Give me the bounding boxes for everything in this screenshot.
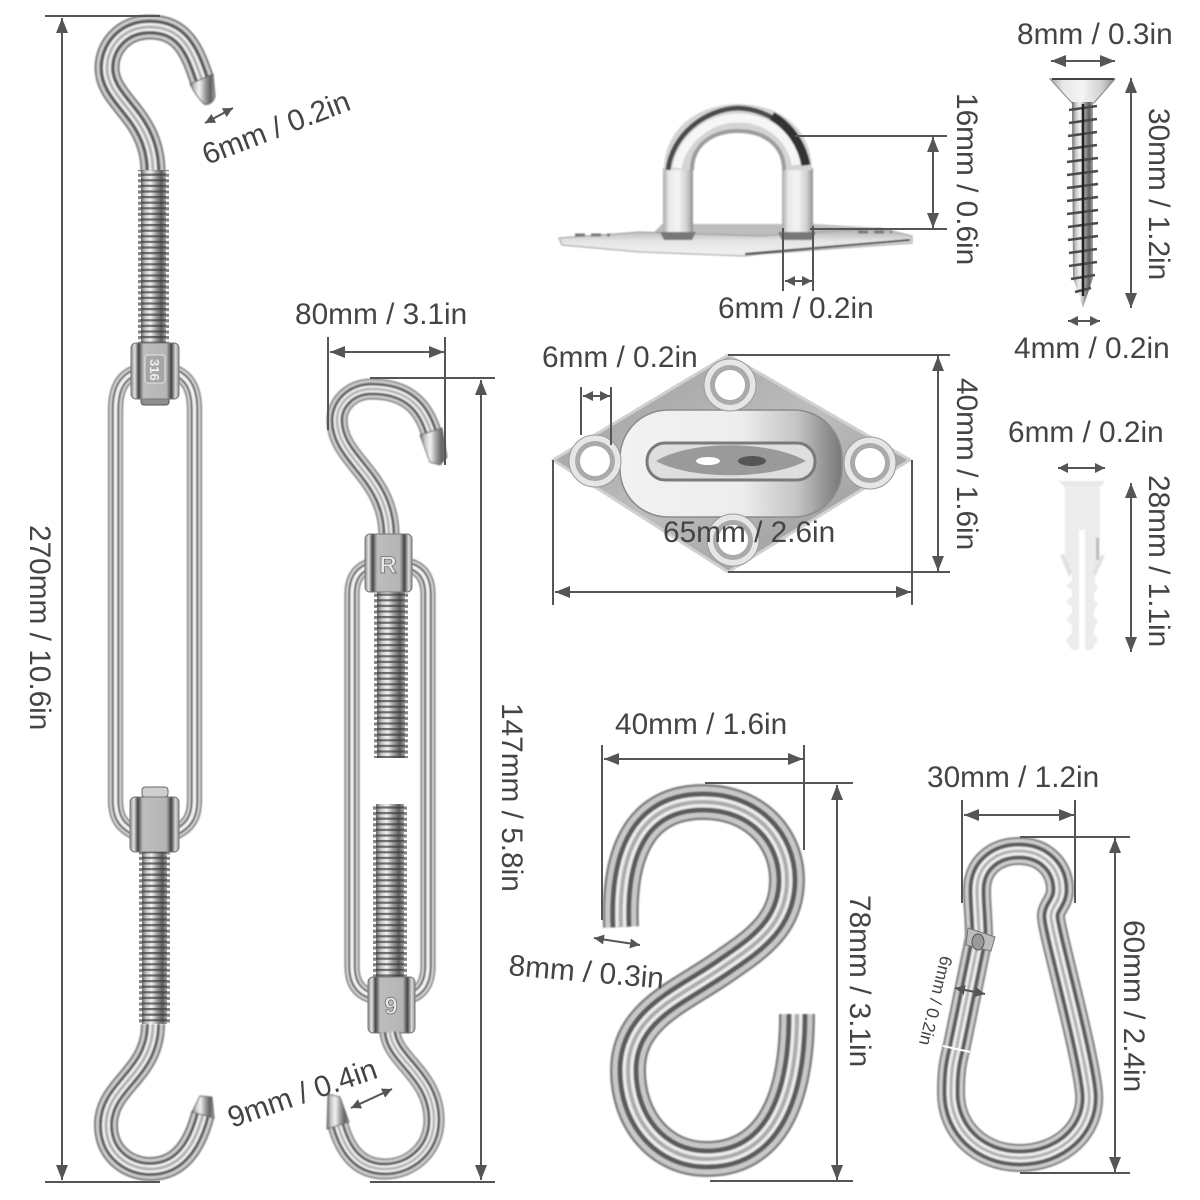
- dimension lines: carabiner: [955, 800, 1130, 1173]
- body frame: [116, 372, 194, 832]
- lower thread: [139, 852, 170, 1024]
- dimension lines: S hook: [594, 745, 853, 1181]
- window nuts: [141, 396, 169, 797]
- label: S hook 8mm: 8mm / 0.3in: [507, 949, 665, 996]
- top hook of small turnbuckle: [337, 389, 447, 534]
- anchor side notch: [1096, 538, 1099, 560]
- base plate side: [559, 224, 912, 256]
- S hook: [621, 802, 797, 1159]
- pad eye top view: [553, 355, 910, 572]
- screw core line: [1082, 104, 1084, 296]
- slot and loop: [647, 443, 815, 480]
- label: pad eye top 6mm: 6mm / 0.2in: [542, 341, 698, 374]
- bottom screw hole: [707, 514, 759, 566]
- U loop arch: [668, 108, 808, 170]
- label: carabiner 30mm: 30mm / 1.2in: [927, 761, 1099, 794]
- label: screw 30mm: 30mm / 1.2in: [1142, 108, 1175, 280]
- wood screw: [1050, 79, 1115, 308]
- screw threads: [1067, 106, 1098, 292]
- upper collar with 316 stamp: [131, 343, 179, 399]
- dimension lines: large turnbuckle: [45, 16, 233, 1182]
- large turnbuckle: [106, 27, 215, 1169]
- label: 147mm: 147mm / 5.8in: [495, 703, 528, 892]
- label: screw 4mm: 4mm / 0.2in: [1014, 332, 1170, 365]
- label: anchor 6mm: 6mm / 0.2in: [1008, 416, 1164, 449]
- top screw hole: [704, 359, 756, 411]
- lower collar with 9: [368, 977, 415, 1033]
- screw shank: [1072, 102, 1093, 308]
- diamond plate: [553, 355, 910, 572]
- lower collar with 9: 9: [384, 993, 398, 1020]
- bottom hook of small turnbuckle: [327, 1032, 434, 1169]
- label: anchor 28mm: 28mm / 1.1in: [1142, 475, 1175, 647]
- screw head: [1050, 79, 1115, 103]
- U loop legs: [660, 168, 816, 240]
- small turnbuckle: [327, 389, 447, 1169]
- label: pad eye 65mm: 65mm / 2.6in: [663, 516, 835, 549]
- label: S hook 40mm: 40mm / 1.6in: [615, 708, 787, 741]
- left screw hole: [569, 435, 621, 487]
- upper collar with 316 stamp: 316: [147, 359, 162, 381]
- dimension lines: screw and anchor: [1051, 61, 1131, 652]
- bottom hook of large turnbuckle: [106, 1024, 214, 1169]
- label: 9mm: 9mm / 0.4in: [224, 1053, 381, 1135]
- body frame of small turnbuckle: [352, 566, 428, 996]
- label: pad eye 40mm: 40mm / 1.6in: [950, 378, 983, 550]
- label: 270mm: 270mm / 10.6in: [23, 525, 56, 730]
- gate head: [966, 928, 995, 951]
- lower collar: [130, 797, 179, 852]
- label: S hook 78mm: 78mm / 3.1in: [843, 895, 876, 1067]
- anchor slot: [1079, 530, 1085, 653]
- dimension lines: pad eye: [553, 136, 950, 605]
- top hook of large turnbuckle: [107, 27, 215, 172]
- gate pin: [972, 934, 984, 950]
- dimension lines: small turnbuckle: [328, 337, 495, 1182]
- label: carabiner 60mm: 60mm / 2.4in: [1117, 920, 1150, 1092]
- right screw hole: [844, 437, 896, 489]
- label: hook 6mm: 6mm / 0.2in: [198, 85, 355, 172]
- lower thread of small turnbuckle: [373, 804, 407, 978]
- carabiner: [943, 851, 1089, 1158]
- label: screw 8mm: 8mm / 0.3in: [1017, 18, 1173, 51]
- central recess: [620, 410, 842, 517]
- upper thread: [138, 170, 169, 343]
- label: pad eye 16mm: 16mm / 0.6in: [950, 93, 983, 265]
- label: 80mm: 80mm / 3.1in: [295, 298, 467, 331]
- upper thread of small turnbuckle: [374, 590, 408, 758]
- upper collar with R: R: [379, 552, 397, 579]
- anchor body and legs: [1065, 486, 1100, 650]
- label: pad eye side 6mm: 6mm / 0.2in: [718, 292, 874, 325]
- label: carabiner gate 6mm: 6mm / 0.2in: [915, 954, 957, 1048]
- anchor collar: [1058, 481, 1105, 487]
- anchor fins: [1060, 554, 1105, 577]
- wall anchor: [1058, 481, 1105, 653]
- upper collar with R: [365, 534, 412, 592]
- carabiner ring: [951, 851, 1089, 1158]
- pad eye side view: [559, 108, 912, 256]
- gate slit: [943, 1046, 970, 1052]
